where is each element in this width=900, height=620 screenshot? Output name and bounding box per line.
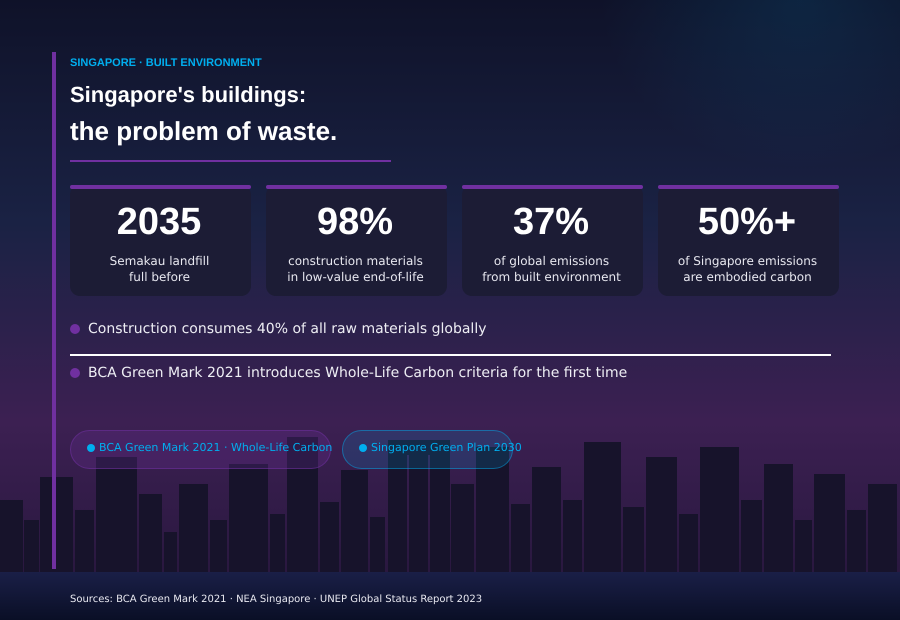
- stat card: 37%: [462, 185, 643, 296]
- sources footer: Sources: BCA Green Mark 2021 · NEA Singapore · UNEP Global Status Report 2023: [70, 594, 482, 605]
- eyebrow label: SINGAPORE · BUILT ENVIRONMENT: [70, 57, 262, 69]
- bullet text 2: BCA Green Mark 2021 introduces Whole-Life Carbon criteria for the first time: [88, 365, 627, 381]
- pill dot 1: [87, 444, 95, 452]
- divider line: [70, 354, 831, 356]
- bullet marker 2: [70, 368, 80, 378]
- stat card: 2035: 2035: [117, 201, 201, 243]
- pill text 2: Singapore Green Plan 2030: [371, 441, 522, 454]
- stat card: 2035: [70, 185, 251, 296]
- pill: BCA Green Mark: [70, 430, 330, 468]
- stat card: 2035: full before: [129, 270, 190, 284]
- title underline: [70, 160, 391, 162]
- stat card: 98%: 98%: [317, 201, 393, 243]
- stat card: 98%: construction materials: [288, 254, 423, 268]
- title: the problem of waste.: [70, 116, 337, 146]
- title: [70, 82, 337, 146]
- stat card: 37%: of global emissions: [494, 254, 609, 268]
- stat card: 2035: Semakau landfill: [110, 254, 209, 268]
- stat card: 50%+: 50%+: [698, 201, 796, 243]
- footer band: [0, 572, 900, 620]
- stat card: 37%: 37%: [513, 201, 589, 243]
- bullet marker 1: [70, 324, 80, 334]
- pill dot 2: [359, 444, 367, 452]
- stat card: 50%+: are embodied carbon: [683, 270, 812, 284]
- title: Singapore's buildings:: [70, 82, 306, 107]
- stat card: 50%+: [658, 185, 839, 296]
- stat card: 37%: from built environment: [482, 270, 621, 284]
- top-right glow: [500, 0, 900, 200]
- stat card: 98%: [266, 185, 447, 296]
- left accent bar: [52, 52, 56, 569]
- stat card: 50%+: of Singapore emissions: [678, 254, 817, 268]
- stat card: 98%: in low-value end-of-life: [287, 270, 424, 284]
- bullet text 1: Construction consumes 40% of all raw materials globally: [88, 321, 486, 337]
- pill text 1: BCA Green Mark 2021 · Whole-Life Carbon: [99, 441, 332, 454]
- city skyline silhouette: [0, 437, 897, 572]
- pill: Green Plan: [342, 430, 512, 468]
